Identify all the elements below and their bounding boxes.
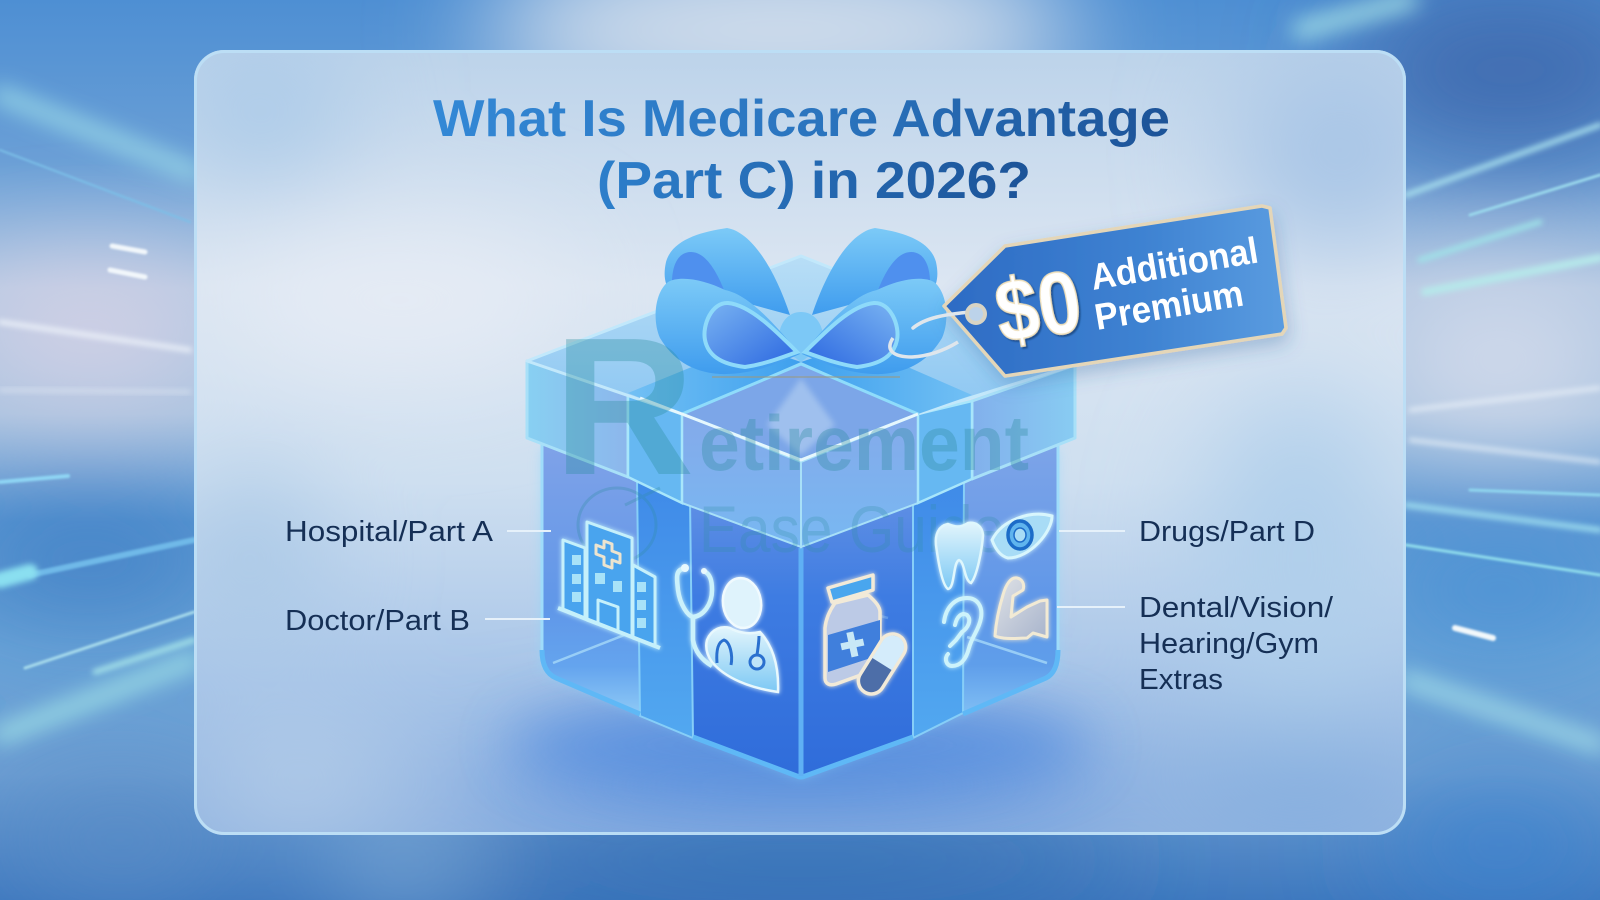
bow [656, 228, 946, 374]
label: Drugs / Part D: Drugs/Part D [1139, 516, 1315, 548]
box outer glow [541, 449, 1058, 778]
front left panel [689, 500, 801, 778]
box bottom rim [542, 650, 1058, 777]
title: What Is Medicare Advantage [433, 90, 1170, 148]
body ribbon right [913, 478, 964, 738]
icon: eye [992, 514, 1052, 558]
diamond reflection [767, 378, 835, 455]
watermark Ease Guide: Ease Guide [699, 492, 1005, 566]
front right panel [801, 500, 913, 778]
title [433, 90, 1170, 210]
watermark check circle [578, 488, 660, 562]
glass right section [962, 445, 1058, 713]
body ribbon left [637, 480, 693, 738]
lid left side [527, 361, 628, 477]
tag price: $0 [988, 251, 1088, 362]
box side edges [542, 445, 1058, 650]
tag hole and string [890, 305, 985, 357]
glass floor lines [553, 608, 1047, 663]
icon: hospital [558, 522, 660, 648]
box floor glow [510, 695, 1090, 795]
lid top face [527, 256, 1075, 414]
tag body [944, 206, 1286, 376]
icon: pill bottle [825, 575, 911, 699]
icon: doctor [677, 564, 778, 692]
front right loop [802, 279, 946, 374]
front left loop [656, 279, 800, 374]
label: Dental / Vision / Hearing / Gym extras: Extras [1139, 664, 1223, 696]
vertical edge highlight [798, 548, 804, 776]
tag Premium: Premium [1092, 273, 1246, 338]
bow knot [778, 312, 824, 362]
watermark [553, 297, 1029, 566]
back right loop [812, 228, 937, 315]
watermark R: R [553, 297, 695, 516]
icon: ear [944, 598, 981, 666]
label: Hospital / Part A: Hospital/Part A [285, 516, 494, 548]
price tag [890, 206, 1286, 376]
back left loop [665, 228, 790, 315]
label: Doctor / Part B: Doctor/Part B [285, 605, 470, 637]
frosted glass panel [170, 40, 1450, 835]
icon: tooth [936, 523, 983, 589]
tag Additional: Additional [1088, 230, 1261, 298]
icon: flexed arm [995, 578, 1047, 638]
faint gold line [712, 376, 900, 378]
label: Dental / Vision / Hearing / Gym extras: Dental/Vision/ [1139, 592, 1334, 624]
lid front faces [682, 414, 801, 547]
watermark Retirement word: etirement [699, 399, 1029, 487]
top ribbon bands [628, 344, 801, 414]
lid ribbon left side [628, 393, 682, 503]
lid edge highlights [640, 398, 918, 460]
lid ribbon right side [918, 401, 972, 503]
gift box [510, 228, 1090, 795]
title: (Part C) in 2026? [597, 152, 1031, 210]
glass left section [542, 445, 640, 715]
top ribbon diamond [682, 364, 918, 460]
label: Dental / Vision / Hearing / Gym extras [1057, 592, 1334, 696]
label: Dental / Vision / Hearing / Gym extras: Hearing/Gym [1139, 628, 1319, 660]
lid right side [972, 365, 1075, 479]
